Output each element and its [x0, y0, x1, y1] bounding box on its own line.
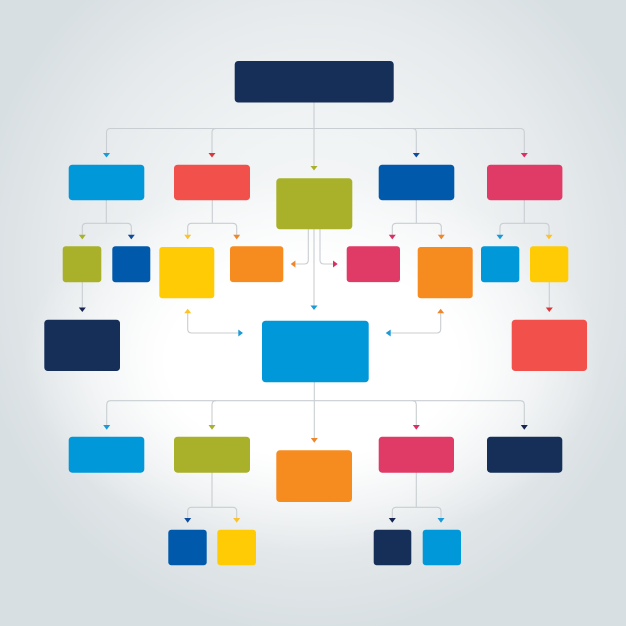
box: level 1 blue	[69, 165, 144, 200]
box: orange	[230, 246, 283, 282]
connector group: second level	[79, 200, 553, 239]
box: pink	[347, 246, 400, 282]
connector group: bottom level	[103, 382, 528, 443]
box: small olive	[63, 246, 101, 282]
box: bottom small navy	[374, 530, 411, 565]
box: central blue	[262, 321, 369, 382]
box: level 1 pink	[487, 165, 562, 200]
connector group: centre box outputs	[291, 229, 338, 310]
connector group: top level	[103, 102, 528, 170]
box: red right	[512, 320, 587, 371]
root box	[235, 61, 394, 102]
box: small blue	[481, 246, 519, 282]
connector: right double arrow	[386, 309, 444, 336]
connector group: bottom sub-branches	[184, 472, 444, 523]
box: bottom olive	[174, 437, 250, 473]
box: navy left	[44, 320, 120, 371]
box: small dark blue	[112, 246, 150, 282]
box: bottom small dark blue	[168, 530, 207, 565]
box: bottom blue	[69, 437, 144, 473]
box: yellow	[159, 247, 214, 298]
box: small yellow	[530, 246, 568, 282]
box: level 1 dark blue	[379, 165, 454, 200]
box: bottom small blue	[423, 530, 461, 565]
box: large orange	[418, 247, 473, 298]
box: bottom navy	[487, 437, 562, 473]
box: bottom small yellow	[217, 530, 256, 565]
box: level 1 red	[174, 165, 250, 200]
box: bottom pink	[379, 437, 454, 473]
connector: left double arrow	[184, 309, 243, 336]
connector group: third level	[79, 282, 553, 312]
box: level 1 olive centre	[276, 178, 352, 229]
box: bottom orange	[276, 450, 352, 502]
